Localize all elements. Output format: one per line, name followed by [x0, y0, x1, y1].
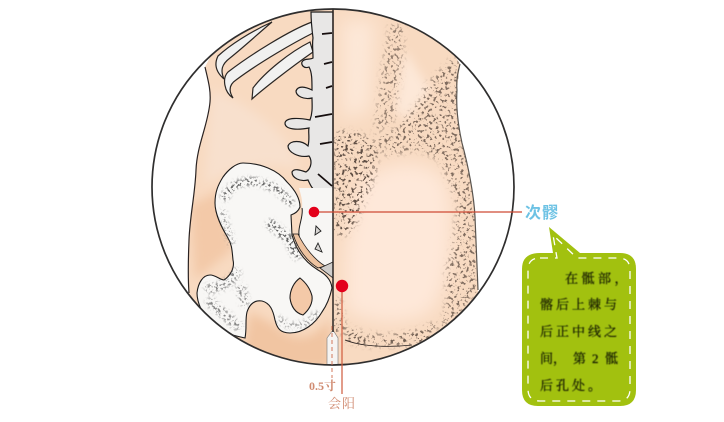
callout: [522, 227, 636, 406]
callout text: [540, 271, 631, 393]
callout text: 骶: [605, 351, 618, 366]
callout text: 髂后上棘与: [540, 297, 620, 312]
pelvis bone: [197, 163, 332, 338]
body skin: [188, 10, 478, 364]
coccyx strip: [327, 330, 338, 365]
obturator foramen: [290, 278, 312, 315]
ribs: [216, 22, 313, 99]
bone stippling: [202, 174, 320, 332]
leader line to 会阳: [341, 286, 343, 394]
label: 会阳: 会阳: [328, 396, 356, 411]
callout text: 后孔处。: [540, 378, 604, 393]
circular frame: [152, 9, 514, 365]
callout bubble: [522, 227, 636, 406]
body outlines: [188, 64, 478, 346]
0.5 cun measurement: 0.5寸: [309, 378, 336, 393]
sacral foramina: [315, 226, 321, 235]
acupoint 次髎: [309, 207, 319, 217]
callout text: 第: [573, 351, 586, 366]
pelvis and sacrum: [195, 160, 333, 340]
callout text: 2: [592, 351, 598, 366]
callout text: 间，: [540, 351, 566, 367]
spine vertebrae: [285, 12, 333, 192]
acupoint 会阳 reference point: [336, 280, 348, 292]
midline: [332, 9, 334, 332]
sacrum: [299, 188, 333, 267]
label: 次髎: 次髎: [525, 204, 559, 222]
callout text: 在骶部，: [565, 271, 631, 287]
0.5 cun measurement: [309, 326, 336, 393]
illustration: back and pelvis in circular frame: [188, 10, 479, 364]
leader line to 次髎: [314, 211, 522, 213]
stippling: right side: [334, 24, 478, 350]
callout text: 后正中线之: [540, 324, 620, 339]
